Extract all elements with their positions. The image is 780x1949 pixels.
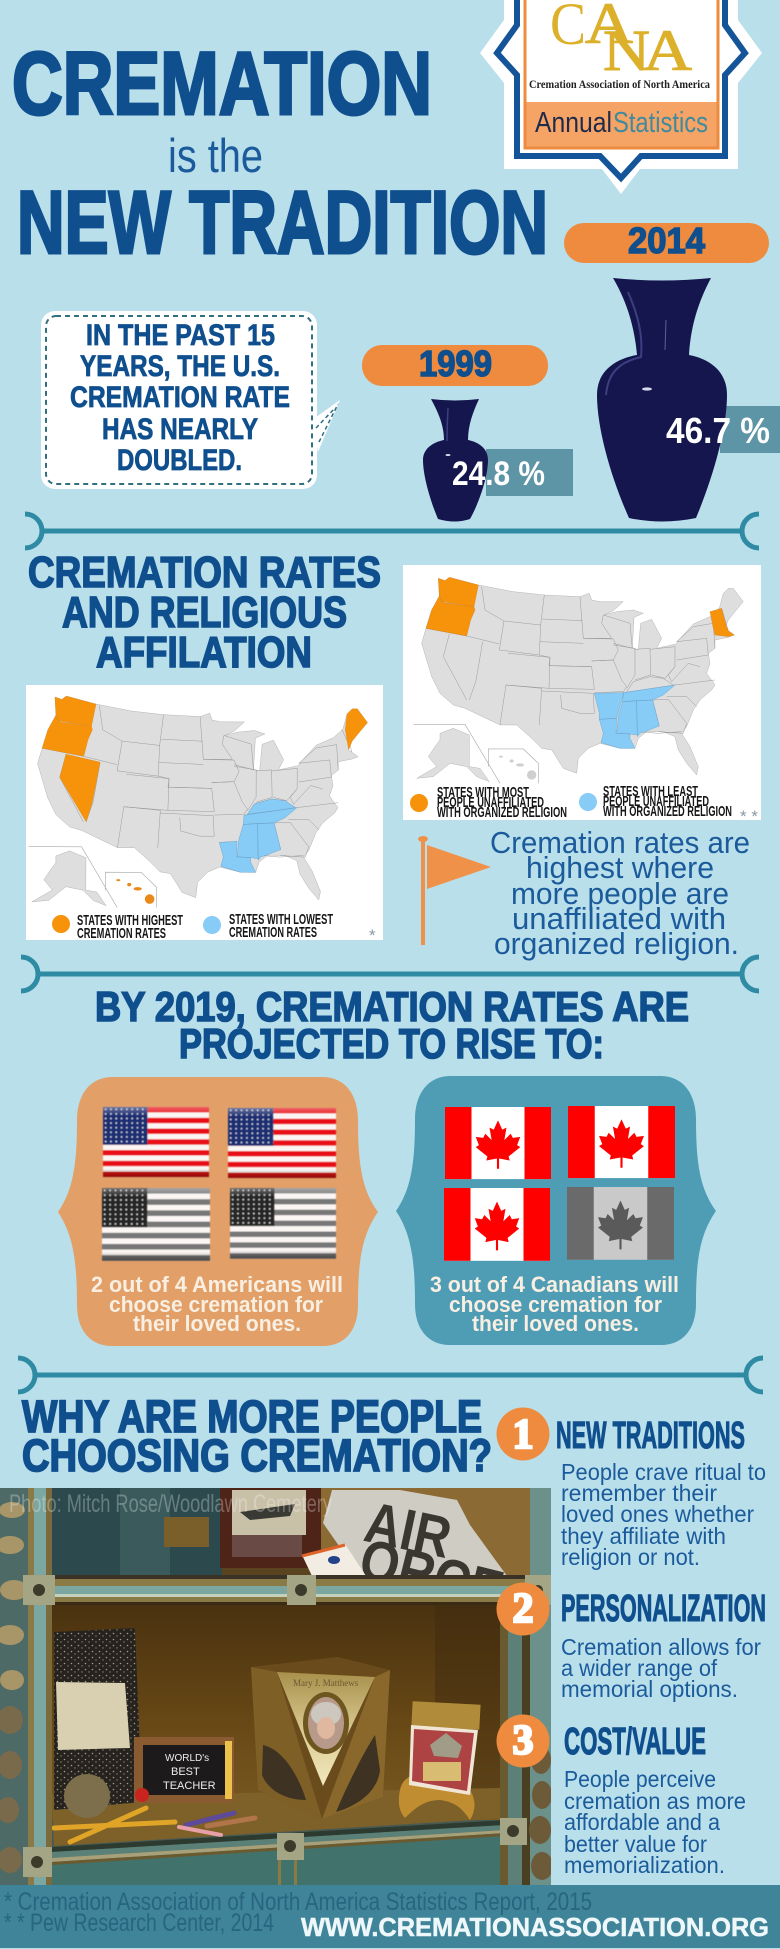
chalkboard frame	[134, 1737, 234, 1803]
text: 2 out of 4 Americans: choose cremation for	[109, 1292, 323, 1317]
callout: past 15 years: YEARS, THE U.S.	[80, 350, 280, 383]
legend: lowest cremation rates: STATES WITH LOWEST	[229, 911, 333, 928]
text: 2 out of 4 Americans: 2 out of 4 Americans will	[91, 1272, 343, 1297]
sources: * * Pew Research Center, 2014	[4, 1909, 274, 1937]
map: US states, religious affiliation	[413, 577, 743, 783]
callout: past 15 years	[41, 311, 340, 489]
legend: highest cremation rates: CREMATION RATES	[77, 925, 166, 942]
text block: loved ones whether	[561, 1501, 754, 1527]
text block	[564, 1766, 746, 1878]
icon: US flag colored	[103, 1107, 209, 1177]
text: 2 out of 4 Americans	[91, 1272, 343, 1336]
legend: least unaffiliated: STATES WITH LEAST	[603, 783, 698, 800]
panel: Canada projection	[396, 1076, 716, 1345]
text: 2 out of 4 Americans: their loved ones.	[133, 1311, 301, 1336]
footnote stars: **	[740, 807, 758, 826]
title: CREMATION	[12, 33, 432, 133]
1999 year pill: 1999	[419, 343, 492, 384]
text block	[561, 1459, 766, 1570]
sources	[4, 1888, 592, 1937]
main niche back wall	[52, 1605, 502, 1820]
legend: highest cremation rates: STATES WITH HIGHEST	[77, 912, 183, 929]
logo badge: CANA Annual Statistics: Annual	[535, 107, 612, 139]
rosettes	[23, 1575, 551, 1877]
icon: US flag gray	[230, 1188, 336, 1259]
title	[12, 33, 548, 272]
website: WWW.CREMATIONASSOCIATION.ORG	[301, 1912, 769, 1942]
legend: most unaffiliated: PEOPLE UNAFFILIATED	[437, 794, 544, 811]
text block: memorialization.	[564, 1852, 725, 1878]
text: cremation rates highest where unaffiliated: organized religion.	[494, 926, 739, 961]
composition notebook	[54, 1628, 142, 1810]
text block: Cremation allows for	[561, 1634, 761, 1660]
text: cremation rates highest where unaffiliated	[490, 825, 750, 961]
footer band	[0, 1885, 780, 1948]
text: 3 out of 4 Canadians	[430, 1272, 679, 1336]
text block	[561, 1634, 761, 1702]
photo: columbarium niche with urn and keepsakes	[0, 1488, 553, 1885]
silver apple	[64, 1774, 110, 1818]
number badge 3	[496, 1714, 550, 1768]
chalkboard frame: TEACHER	[163, 1780, 216, 1792]
text block: they affiliate with	[561, 1523, 726, 1549]
text block: affordable and a	[564, 1809, 720, 1835]
bottom rail and panel	[52, 1820, 505, 1885]
legend: lowest cremation rates: CREMATION RATES	[229, 924, 317, 941]
text block: memorial options.	[561, 1676, 738, 1702]
2014 vase with 46.7 percent	[597, 278, 780, 522]
photo credit: Photo: Mitch Rose/Woodlawn Cemetery	[9, 1490, 332, 1518]
reason 3: cost and value	[496, 1714, 746, 1878]
panel: map of most and least religiously unaffiliated	[403, 565, 761, 826]
heading: why are more people choosing cremation: WHY ARE MORE PEOPLE	[22, 1391, 482, 1442]
heading: cremation rates and religious affiliation	[28, 548, 381, 677]
panel: map of highest and lowest cremation rates	[26, 685, 383, 945]
sources: * Cremation Association of North America Statistics Report, 2015	[4, 1888, 592, 1916]
reason 2: personalization	[496, 1582, 766, 1702]
text: 3 out of 4 Canadians: choose cremation for	[449, 1292, 662, 1317]
callout: past 15 years: CREMATION RATE	[70, 381, 290, 414]
legend: most unaffiliated	[410, 784, 567, 821]
text block: People crave ritual to	[561, 1459, 766, 1485]
logo badge: CANA Annual Statistics: Statistics	[613, 107, 708, 139]
logo badge: CANA Annual Statistics: Cremation Association of North America	[529, 79, 710, 91]
upper niche: AIR	[359, 1489, 457, 1571]
red plaque on easel	[399, 1701, 481, 1820]
1999 vase with 24.8 percent: 24.8 %	[452, 455, 545, 493]
2014 year pill	[564, 220, 769, 263]
number badge 2: 2	[512, 1586, 534, 1632]
callout: past 15 years: HAS NEARLY	[102, 413, 258, 446]
heading: cremation rates and religious affiliation: AND RELIGIOUS	[62, 588, 347, 637]
text: 3 out of 4 Canadians: their loved ones.	[472, 1311, 639, 1336]
text block: religion or not.	[561, 1544, 700, 1570]
number badge 1	[496, 1408, 550, 1460]
legend: highest cremation rates	[52, 912, 183, 942]
icon: Canada flag colored	[568, 1106, 675, 1178]
number badge 1: 1	[512, 1412, 534, 1458]
heading: why are more people choosing cremation: CHOOSING CREMATION?	[22, 1430, 492, 1481]
1999 vase with 24.8 percent	[423, 399, 573, 522]
legend: least unaffiliated	[579, 783, 732, 820]
callout: past 15 years: IN THE PAST 15	[86, 319, 275, 352]
text: cremation rates highest where unaffiliated: highest where	[526, 850, 714, 885]
legend: least unaffiliated: PEOPLE UNAFFILIATED	[603, 793, 709, 810]
text: cremation rates highest where unaffiliated: more people are	[511, 876, 729, 911]
right column and ornament	[500, 1488, 553, 1885]
logo badge: CANA Annual Statistics	[480, 0, 762, 194]
left column and ornament	[0, 1488, 52, 1885]
icon: Canada flag colored	[444, 1188, 550, 1261]
callout: past 15 years: DOUBLED.	[117, 444, 242, 477]
chalkboard frame: WORLD's	[165, 1753, 209, 1764]
upper niche	[52, 1488, 530, 1575]
text block: a wider range of	[561, 1655, 718, 1681]
panel: United States projection	[58, 1077, 378, 1346]
icon: US flag colored	[228, 1108, 336, 1178]
text: cremation rates highest where unaffiliated: Cremation rates are	[490, 825, 750, 860]
number badge 3: 3	[512, 1718, 534, 1764]
icon: orange flag	[418, 836, 491, 945]
niche floor	[52, 1788, 505, 1846]
1999 year pill	[362, 343, 548, 386]
title: is the	[168, 129, 263, 182]
logo badge: CANA Annual Statistics: N	[603, 18, 650, 83]
footnote star: *	[369, 926, 376, 945]
text block: better value for	[564, 1831, 707, 1857]
heading: by 2019 projection: BY 2019, CREMATION RATES ARE	[95, 983, 689, 1030]
horizontal shelf rail	[52, 1575, 530, 1605]
map: US states, cremation rates	[28, 696, 368, 909]
legend: most unaffiliated: STATES WITH MOST	[437, 784, 529, 801]
reason 1: new traditions	[496, 1408, 766, 1570]
icon: Canada flag colored	[445, 1107, 551, 1179]
icon: US flag gray	[102, 1188, 210, 1261]
2014 year pill: 2014	[628, 220, 705, 261]
heading: by 2019 projection	[95, 983, 689, 1067]
heading: cremation rates and religious affiliation: CREMATION RATES	[28, 548, 381, 597]
heading: by 2019 projection: PROJECTED TO RISE TO:	[179, 1020, 604, 1067]
pencils and crayons	[54, 1808, 255, 1842]
upper niche: ORCE	[353, 1526, 510, 1625]
number badge 2	[496, 1582, 550, 1636]
heading: why are more people choosing cremation	[22, 1391, 492, 1481]
text block: remember their	[561, 1480, 717, 1506]
logo badge: CANA Annual Statistics: A	[643, 18, 692, 83]
legend: most unaffiliated: WITH ORGANIZED RELIGION	[437, 804, 567, 821]
chalkboard frame: BEST	[171, 1766, 200, 1778]
legend: lowest cremation rates	[203, 911, 333, 941]
text block: cremation as more	[564, 1788, 746, 1814]
pyramid urn: Mary J. Matthews	[293, 1678, 359, 1688]
text: 3 out of 4 Canadians: 3 out of 4 Canadians will	[430, 1272, 679, 1297]
text: cremation rates highest where unaffiliated: unaffiliated with	[512, 901, 726, 936]
icon: Canada flag gray	[567, 1187, 674, 1260]
text block: People perceive	[564, 1766, 716, 1792]
pyramid urn	[251, 1657, 390, 1819]
title: NEW TRADITION	[17, 172, 548, 272]
heading: cremation rates and religious affiliation: AFFILATION	[96, 628, 312, 677]
2014 vase with 46.7 percent: 46.7 %	[666, 410, 770, 451]
